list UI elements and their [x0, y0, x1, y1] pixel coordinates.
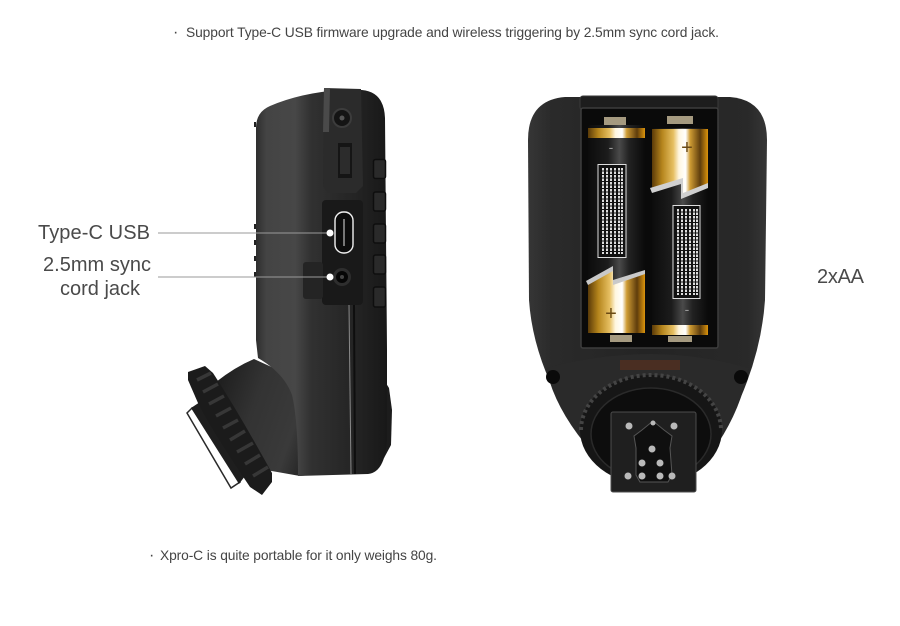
- callout: Type-C USB: [38, 222, 334, 244]
- shoulder mound: [546, 354, 748, 452]
- port panel: [322, 200, 363, 305]
- left edge dots: [254, 122, 256, 277]
- flap window: [338, 143, 352, 178]
- bottom caption: ·: [149, 547, 154, 564]
- left AA battery: [586, 125, 645, 333]
- top caption: Support Type-C USB firmware upgrade and wireless triggering by 2.5mm sync cord jack.: [186, 25, 719, 40]
- locking ring: [580, 375, 722, 485]
- neck of hot shoe: [216, 359, 320, 476]
- plate recess: [634, 421, 672, 482]
- callout: 2.5mm sync cord jack: [43, 254, 334, 300]
- right AA battery: +: [681, 137, 693, 159]
- sync hole: [333, 109, 351, 127]
- bottom caption: Xpro-C is quite portable for it only weighs 80g.: [160, 548, 437, 563]
- rear view of transmitter: [528, 96, 767, 492]
- callout: 2.5mm sync cord jack: 2.5mm sync: [43, 254, 151, 276]
- top caption: ·: [173, 24, 178, 41]
- Type-C port: [335, 212, 353, 253]
- callout: 2.5mm sync cord jack: cord jack: [60, 278, 141, 300]
- wheel on right edge: [384, 380, 392, 458]
- battery compartment: [581, 108, 718, 348]
- side view of transmitter: [187, 88, 392, 495]
- right AA battery: [650, 128, 708, 335]
- battery door hinge: [580, 96, 718, 110]
- left AA battery: -: [609, 139, 614, 155]
- body shell: [256, 90, 387, 476]
- body shell: [528, 97, 767, 452]
- right AA battery: -: [685, 301, 690, 317]
- shoe plate: [187, 408, 240, 488]
- battery contacts: [604, 116, 693, 342]
- label: 2xAA: 2xAA: [817, 266, 865, 288]
- left AA battery: +: [605, 303, 617, 325]
- side buttons: [374, 160, 386, 307]
- lower seam: [349, 305, 351, 474]
- rubber flap: [323, 88, 363, 193]
- shoe plate: [611, 412, 696, 492]
- 2.5mm jack: [333, 268, 351, 286]
- callout: Type-C USB: Type-C USB: [38, 222, 150, 244]
- screws: [546, 370, 560, 384]
- locking ring: [188, 366, 272, 495]
- contact pins: [624, 420, 678, 480]
